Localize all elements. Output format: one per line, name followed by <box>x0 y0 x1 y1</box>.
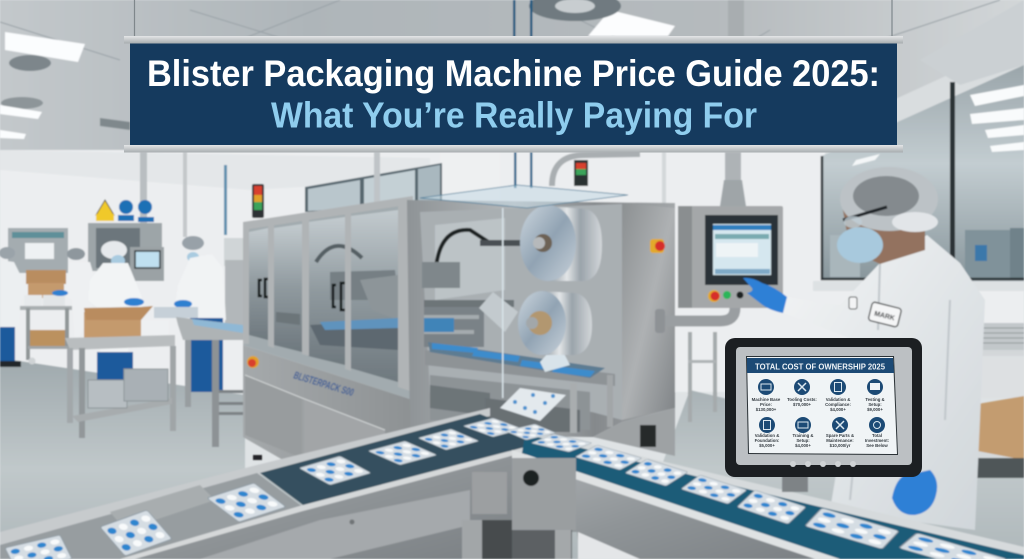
small rear conveyor <box>154 307 245 447</box>
blister machine: base cabinet <box>243 345 413 460</box>
right conveyor <box>512 428 1024 559</box>
blister machine: forming section <box>407 200 675 456</box>
tablet cell: validation and foundation: Validation & <box>755 433 779 438</box>
blister packs on left conveyor <box>5 483 286 559</box>
floor <box>0 358 1024 559</box>
tablet cell: validation and compliance: $4,000+ <box>830 407 846 412</box>
packing cart <box>20 270 72 364</box>
blister machine: glass enclosure <box>243 196 413 400</box>
back wall <box>0 0 1024 392</box>
machine model name: BLISTERPACK S00 <box>292 370 356 399</box>
back cabinets <box>8 223 245 330</box>
stainless pipe <box>655 308 735 422</box>
tablet cell: spare parts and maintenance: $10,000/yr <box>830 443 851 448</box>
tablet cell: validation and foundation: $5,000+ <box>759 443 775 448</box>
operator: blue glove touching panel <box>743 278 787 313</box>
tablet cell: machine base price: Machine Base <box>752 397 781 402</box>
tablet cell: training and setup <box>792 417 814 448</box>
gloved hand holding tablet <box>892 470 937 515</box>
tablet cell: validation and compliance: Compliance: <box>825 402 851 407</box>
tablet cell: tooling costs: Tooling Costs: <box>787 397 817 402</box>
tablet cell: tooling costs: $70,000+ <box>793 402 812 407</box>
tablet cell: total investment <box>865 417 890 448</box>
tablet cell: testing and setup <box>865 379 885 412</box>
ceiling <box>0 0 1024 160</box>
tablet cell: validation and foundation: Foundation: <box>755 438 780 443</box>
tablet cell: total investment: Investment: <box>865 438 890 443</box>
tablet cell: training and setup: $4,000+ <box>795 443 811 448</box>
tablet cell: machine base price: $130,000+ <box>756 407 777 412</box>
operator: coat: MARK <box>873 310 895 322</box>
tablet cell: validation and compliance: Validation & <box>826 397 850 402</box>
tablet cell: tooling costs <box>787 379 817 407</box>
operator: head with hairnet and mask <box>837 167 938 264</box>
tablet stand <box>782 472 808 492</box>
operator: coat <box>783 235 985 530</box>
worker far left <box>0 247 30 367</box>
shelving with stacks and carton <box>972 323 1024 478</box>
tablet cell: spare parts and maintenance: Maintenance: <box>826 438 854 443</box>
worker center <box>88 241 144 382</box>
lower foil roll <box>518 291 592 355</box>
packing table with carton <box>65 306 176 438</box>
worker right of table <box>174 236 226 392</box>
tablet cell: validation and foundation <box>755 417 780 448</box>
title line two: What You’re Really Paying For <box>271 94 757 136</box>
left conveyor <box>0 408 526 559</box>
upper foil roll <box>480 205 602 281</box>
worker second left <box>52 248 98 345</box>
tablet cell: testing and setup: Setup: <box>868 402 882 407</box>
tablet cell: spare parts and maintenance <box>826 417 854 448</box>
banner top rail <box>124 36 903 44</box>
tablet header: TOTAL COST OF OWNERSHIP 2025 <box>755 362 885 372</box>
left blue belt <box>260 414 527 505</box>
tablet cell: total investment: See Below <box>866 443 888 448</box>
tablet buttons <box>790 461 856 467</box>
tablet cell: total investment: Total <box>872 433 882 438</box>
hanging banner <box>124 0 903 152</box>
tablet cell: validation and compliance <box>825 379 851 412</box>
tablet cell: testing and setup: Testing & <box>865 397 885 402</box>
tablet header <box>747 358 894 373</box>
rear window <box>305 152 532 212</box>
blister packs on left belt <box>299 418 556 485</box>
banner bottom rail <box>124 145 903 152</box>
tablet cell: machine base price: Price: <box>760 402 773 407</box>
control panel <box>678 206 783 308</box>
safety signs <box>96 200 154 222</box>
tablet cell: testing and setup: $9,000+ <box>867 407 883 412</box>
title line one: Blister Packaging Machine Price Guide 2025: <box>147 53 880 94</box>
tablet cell: spare parts and maintenance: Spare Parts & <box>826 433 854 438</box>
blister packs on right belt <box>531 434 1007 559</box>
blister film strip <box>479 292 570 421</box>
tablet: total cost of ownership <box>725 338 922 477</box>
tablet cell: training and setup: Training & <box>792 433 814 438</box>
side pipe and overhead column <box>140 152 746 247</box>
tablet cell: machine base price <box>752 379 781 412</box>
tablet cell: training and setup: Setup: <box>796 438 810 443</box>
glass top cover <box>420 185 628 398</box>
right window <box>813 65 1024 291</box>
